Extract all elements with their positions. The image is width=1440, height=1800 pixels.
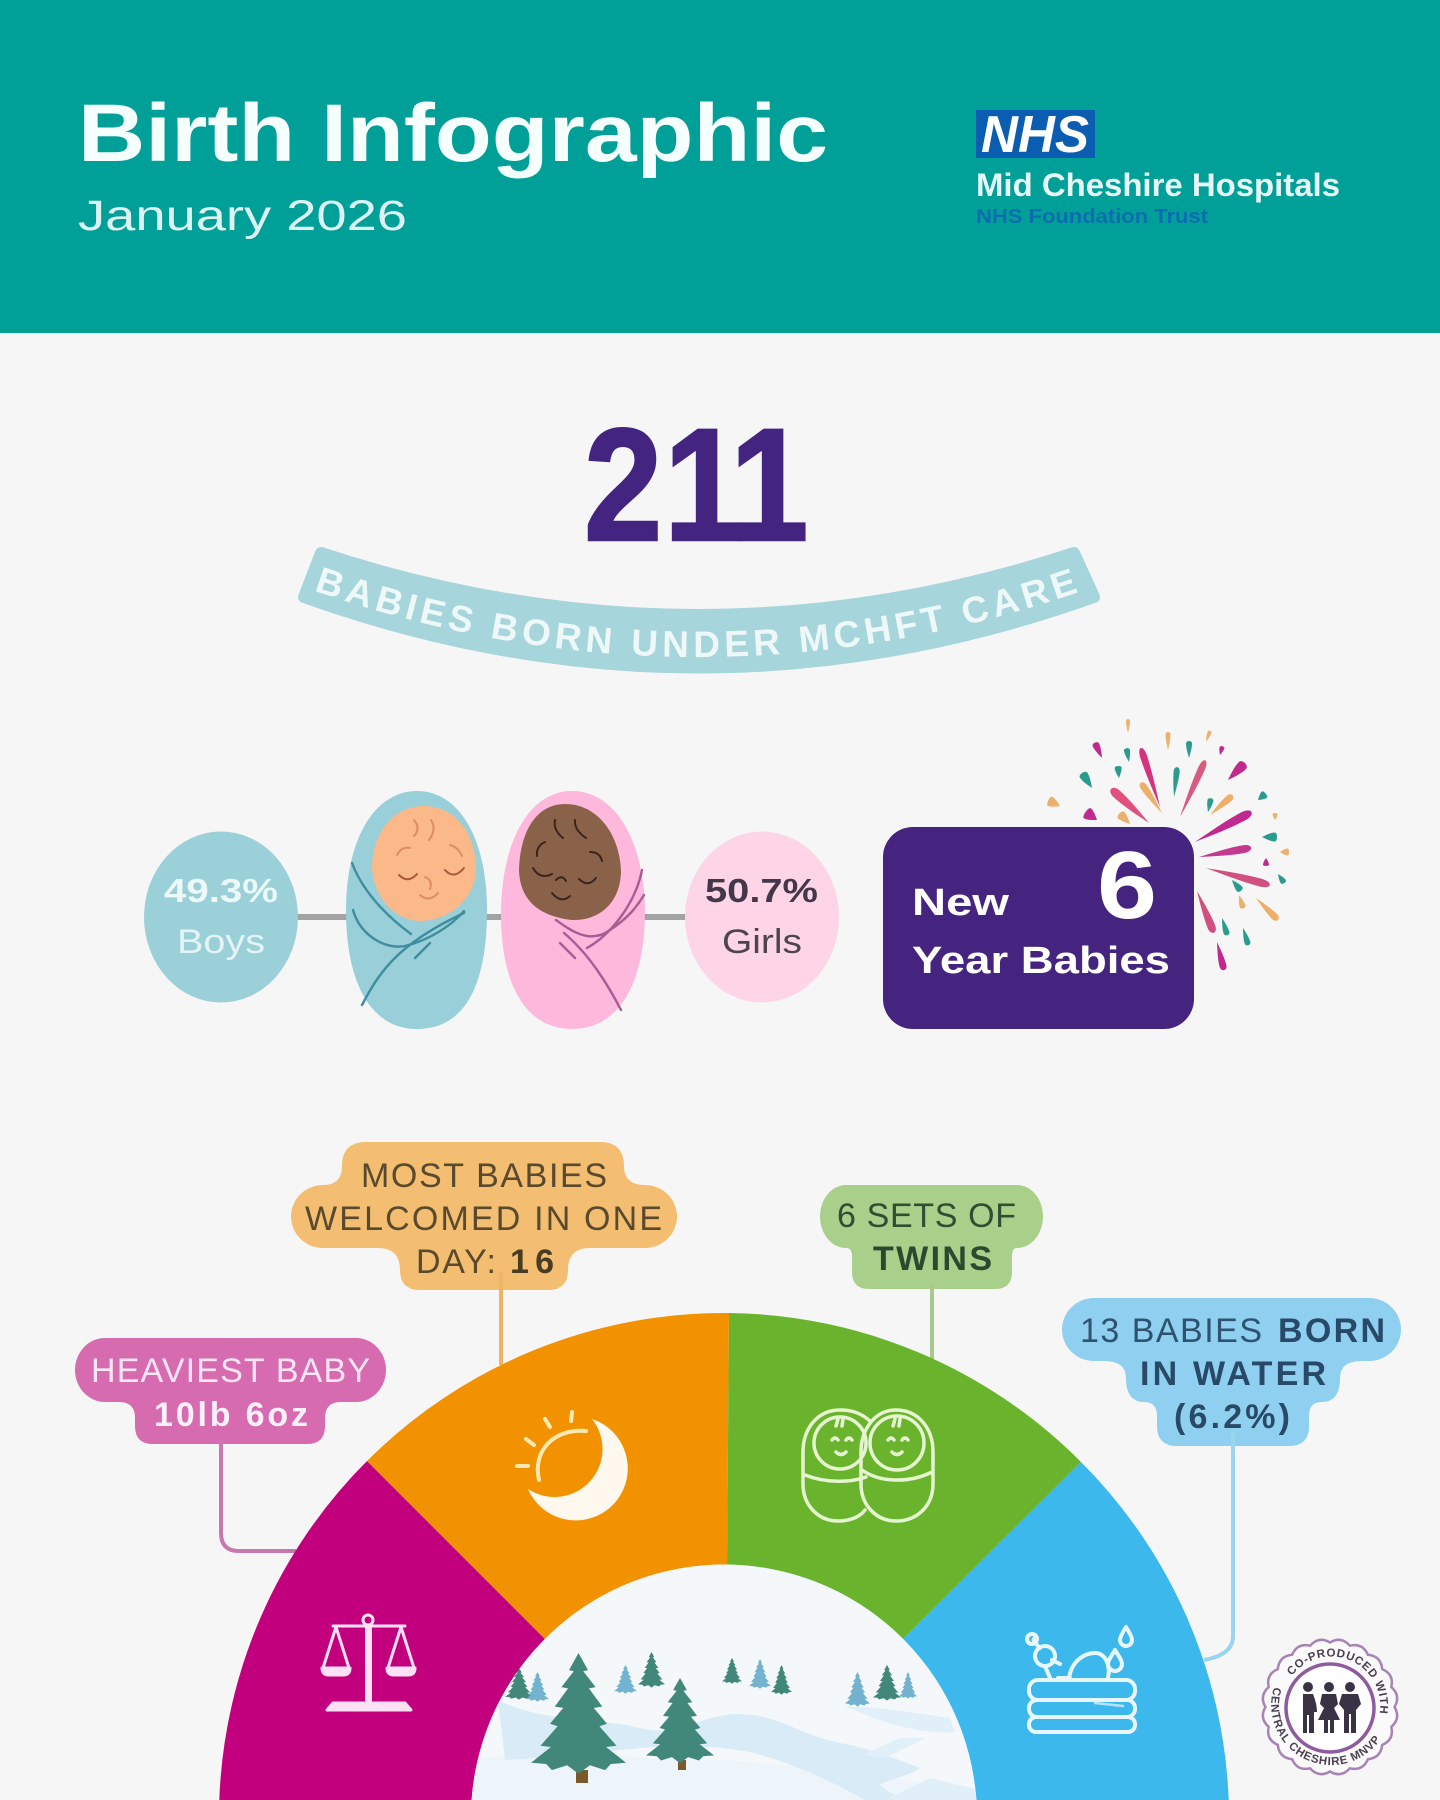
callout: twins xyxy=(820,1185,1043,1289)
callout: most babies in one day: 16 xyxy=(510,1243,554,1281)
winter scene xyxy=(470,1564,980,1800)
segment: twins xyxy=(727,1313,1081,1639)
NHS logo xyxy=(976,106,1340,228)
title: Birth Infographic xyxy=(78,88,828,179)
connector between boys and girls xyxy=(295,914,687,920)
callout: heaviest baby: 10lb 6oz xyxy=(154,1396,308,1434)
subtitle date: January 2026 xyxy=(78,192,407,240)
curved banner: BABIES BORN UNDER MCHFT CARE xyxy=(316,567,1078,658)
family figures xyxy=(1303,1682,1361,1733)
icon: moon and sun xyxy=(517,1412,628,1520)
callout: born in water: (6.2%) xyxy=(1174,1398,1290,1436)
header band xyxy=(0,0,1440,333)
callout: twins: 6 SETS OF xyxy=(837,1197,1016,1235)
callout: born in water: BORN xyxy=(1278,1312,1385,1350)
baby in pink blanket xyxy=(501,791,645,1029)
fireworks xyxy=(1046,719,1289,971)
callout: heaviest baby xyxy=(75,1338,386,1444)
boys stat bubble xyxy=(144,832,298,1002)
icon: scales xyxy=(322,1615,415,1710)
new year babies box xyxy=(883,827,1194,1029)
callout: most babies in one day: WELCOMED IN ONE xyxy=(305,1200,662,1238)
new year babies box: New xyxy=(912,882,1010,924)
callout: born in water: 13 BABIES xyxy=(1080,1312,1262,1350)
girls stat bubble: 50.7% xyxy=(705,872,818,909)
connector line: most babies xyxy=(499,1272,503,1365)
NHS logo: NHS Foundation Trust xyxy=(976,206,1208,228)
callout: born in water xyxy=(1062,1298,1401,1446)
girls stat bubble: Girls xyxy=(722,923,802,961)
connector line: heaviest baby xyxy=(221,1440,296,1551)
NHS logo: NHS xyxy=(981,106,1089,164)
boys stat bubble: Boys xyxy=(177,923,265,961)
boys stat bubble: 49.3% xyxy=(164,872,278,909)
badge: co-produced with Central Cheshire MNVP: CO-PRODUCED WITH xyxy=(1288,1648,1388,1714)
new year babies box: 6 xyxy=(1097,832,1157,939)
headline number 211: 211 xyxy=(584,396,808,574)
badge: co-produced with Central Cheshire MNVP: CENTRAL CHESHIRE MNVP xyxy=(1271,1688,1378,1766)
new year babies box: Year Babies xyxy=(912,940,1170,982)
callout: twins: TWINS xyxy=(873,1240,992,1278)
icon: birth pool xyxy=(1027,1627,1135,1732)
NHS logo: Mid Cheshire Hospitals xyxy=(976,167,1340,203)
segment: water births xyxy=(903,1462,1229,1800)
badge: co-produced with Central Cheshire MNVP xyxy=(1262,1638,1398,1776)
segment: busiest day xyxy=(367,1313,729,1639)
callout: heaviest baby: HEAVIEST BABY xyxy=(91,1352,370,1390)
connector line: water births xyxy=(1204,1432,1233,1660)
callout: born in water: IN WATER xyxy=(1140,1355,1326,1393)
callout: most babies in one day: MOST BABIES xyxy=(361,1157,607,1195)
segment: weight xyxy=(219,1461,545,1800)
girls stat bubble xyxy=(685,832,839,1002)
icon: twin babies xyxy=(803,1410,933,1521)
connector line: twins xyxy=(930,1285,934,1362)
callout: most babies in one day xyxy=(291,1142,677,1290)
baby in blue blanket xyxy=(346,791,487,1029)
half-donut chart xyxy=(219,1313,1229,1800)
callout: most babies in one day: DAY: xyxy=(416,1243,496,1281)
